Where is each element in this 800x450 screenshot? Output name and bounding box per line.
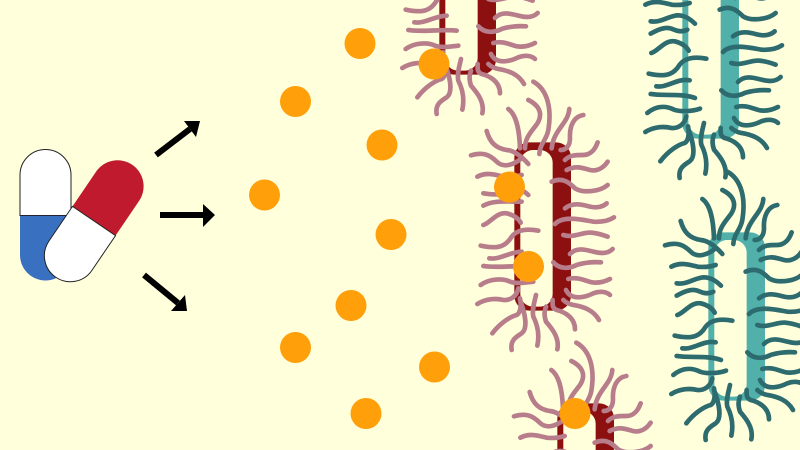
bacterium: teal, bottom [665,172,800,440]
bacterium: red, middle [471,82,614,350]
bacterium: red, top [396,0,539,114]
arrow: middle [160,204,215,227]
bacterium: red, bottom [514,343,657,450]
icon: blue and white capsule [20,150,71,280]
bacterium: teal, top [639,0,782,178]
antibiotic particles [249,28,590,429]
arrow: lower [144,275,187,311]
icon: red and white capsule [34,150,154,292]
arrow: upper [156,121,200,155]
